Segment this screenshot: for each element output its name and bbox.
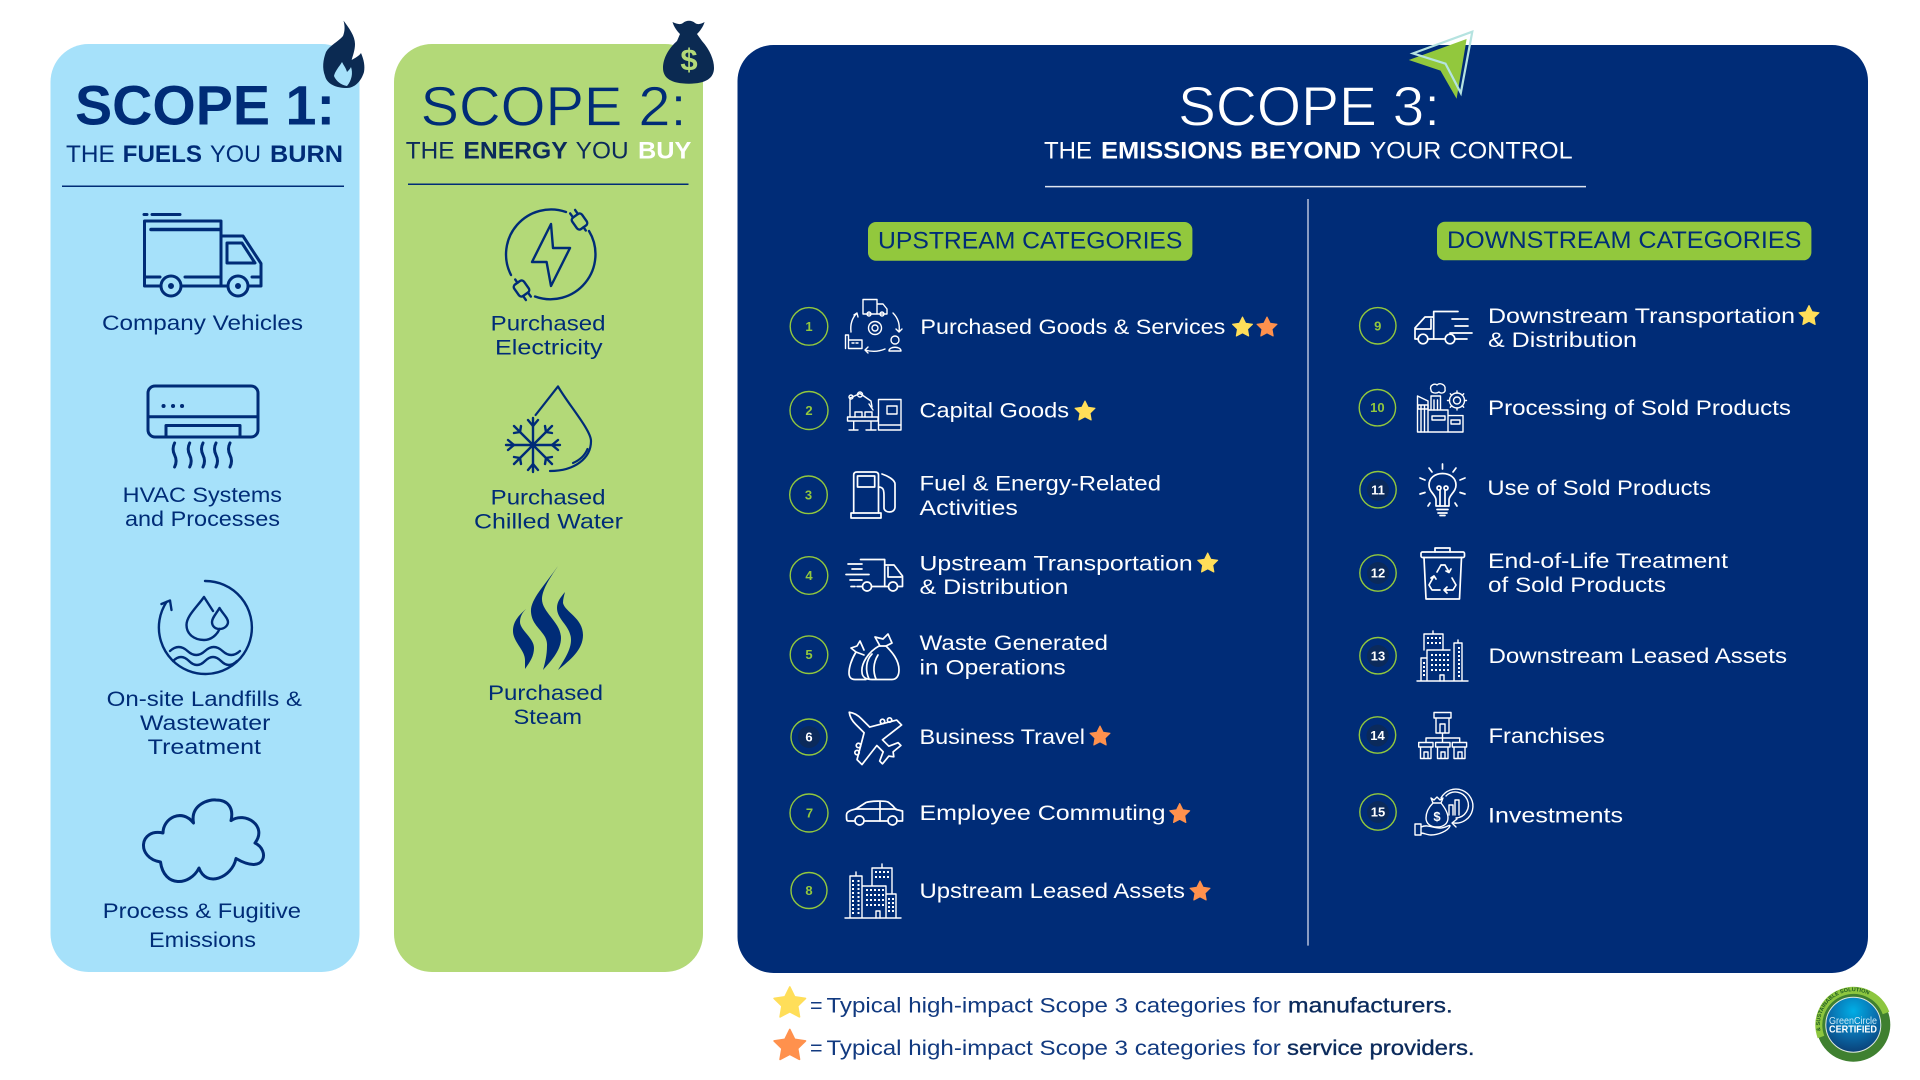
badge: greencircle certified: CERTIFIED <box>1829 1023 1877 1035</box>
category 7: 7 <box>806 806 813 820</box>
category 10 <box>1359 384 1791 432</box>
label: Processing of Sold Products <box>1488 397 1791 420</box>
icon: electricity plug circle <box>506 208 595 302</box>
star: service providers <box>1090 726 1110 745</box>
legend text: = <box>810 993 823 1017</box>
icon: factory robot <box>848 392 901 430</box>
icon: fuel pump <box>851 472 895 518</box>
category 2: 2 <box>805 403 813 418</box>
label: Employee Commuting <box>920 802 1166 825</box>
category 6 <box>791 692 1110 777</box>
category 2 <box>790 392 1095 430</box>
subheading: the fuels you burn <box>66 141 343 168</box>
upstream column heading: UPSTREAM CATEGORIES <box>878 228 1182 255</box>
label: on-site landfills and wastewater treatment <box>107 688 302 759</box>
legend: manufacturers <box>774 987 1453 1017</box>
label: in Operations <box>920 656 1066 679</box>
label: & Distribution <box>920 576 1068 599</box>
label: Activities <box>920 497 1018 520</box>
label: process and fugitive emissions: Process & Fugitive <box>103 900 301 923</box>
label <box>920 552 1193 599</box>
label: company vehicles: Company Vehicles <box>102 312 303 335</box>
label: purchased electricity <box>491 313 606 360</box>
panel: scope 1 <box>50 21 364 972</box>
icon: city buildings <box>1417 631 1468 681</box>
icon: waste bags <box>849 634 899 680</box>
panel background <box>394 44 703 972</box>
subheading: the emissions beyond your control: EMISSIONS <box>1101 137 1242 164</box>
icon: franchise stores <box>1419 712 1467 758</box>
category 12: 12 <box>1371 566 1385 580</box>
subheading: the fuels you burn: BURN <box>270 141 343 168</box>
icon: money bag <box>663 21 714 84</box>
category 5: 5 <box>805 647 813 662</box>
label: process and fugitive emissions <box>103 900 301 952</box>
subheading: the energy you buy: BUY <box>638 137 691 164</box>
label: on-site landfills and wastewater treatment: Wastewater <box>140 712 270 735</box>
subheading: the emissions beyond your control <box>1044 137 1573 164</box>
legend star: orange <box>774 1030 805 1059</box>
star: manufacturers <box>1198 553 1218 572</box>
label: Upstream Leased Assets <box>920 880 1185 903</box>
legend text <box>810 993 1453 1017</box>
category 7 <box>790 794 1190 832</box>
category 4 <box>790 552 1218 599</box>
heading: scope 1: SCOPE 1: <box>75 74 335 137</box>
legend text: service providers. <box>1287 1036 1475 1060</box>
label: purchased electricity: Purchased <box>491 313 606 336</box>
label: Franchises <box>1488 725 1605 748</box>
star: manufacturers <box>1075 401 1095 420</box>
icon: chilled water drop <box>506 386 591 472</box>
icon: processing factory <box>1418 384 1466 432</box>
label <box>920 473 1161 520</box>
star: service providers <box>1170 804 1190 822</box>
subheading: the fuels you burn: YOU <box>210 141 261 168</box>
subheading: the energy you buy: ENERGY <box>463 137 568 164</box>
label: Investments <box>1488 804 1623 827</box>
subheading: the emissions beyond your control: THE <box>1044 137 1092 164</box>
panel: scope 2 <box>394 21 714 972</box>
category 8 <box>791 864 1210 918</box>
panel: scope 3 <box>738 32 1868 973</box>
icon: flame <box>323 21 364 88</box>
icon: investment hand and bag: $ <box>1433 809 1441 824</box>
label <box>1488 550 1728 597</box>
category 1 <box>790 300 1277 353</box>
label: Business Travel <box>920 726 1085 749</box>
label: hvac systems and processes: HVAC Systems <box>123 484 282 507</box>
icon: city buildings <box>845 864 901 918</box>
legend text: = <box>810 1036 823 1060</box>
subheading: the emissions beyond your control: BEYOND <box>1250 137 1361 164</box>
legend text: manufacturers. <box>1288 993 1453 1017</box>
icon: hvac unit <box>148 386 258 467</box>
category 13: 13 <box>1371 648 1385 664</box>
icon: steam <box>513 566 583 670</box>
category 4: 4 <box>805 568 813 583</box>
category 14 <box>1359 712 1605 758</box>
category 12 <box>1360 548 1728 599</box>
label: Waste Generated <box>920 632 1108 655</box>
label: purchased chilled water: Chilled Water <box>474 511 623 534</box>
label: Downstream Leased Assets <box>1488 645 1787 668</box>
category 6: 6 <box>805 730 813 744</box>
category 5 <box>790 632 1108 680</box>
star: manufacturers <box>1799 306 1819 324</box>
icon: delivery truck <box>846 560 902 591</box>
heading: scope 3: SCOPE 3: <box>1178 75 1440 138</box>
panel background <box>738 45 1868 973</box>
icon: light bulb <box>1420 464 1465 516</box>
legend text: Typical high-impact Scope 3 categories for <box>826 993 1281 1017</box>
heading: scope 2: SCOPE 2: <box>420 74 686 137</box>
icon: value chain <box>846 300 902 353</box>
downstream column heading: DOWNSTREAM CATEGORIES <box>1447 227 1801 254</box>
category 3: 3 <box>805 487 812 502</box>
label: & Distribution <box>1488 329 1637 352</box>
legend text <box>810 1036 1475 1060</box>
label: of Sold Products <box>1488 574 1666 597</box>
label: purchased chilled water: Purchased <box>491 486 606 510</box>
icon: money bag: $ <box>680 42 698 77</box>
icon: water cycle <box>159 581 252 674</box>
category 9: 9 <box>1374 318 1381 333</box>
label: hvac systems and processes: and Processes <box>125 508 280 531</box>
upstream column heading <box>868 222 1192 261</box>
icon: delivery truck <box>1415 312 1472 344</box>
icon: airplane <box>829 692 914 777</box>
icon: paper arrow <box>1409 32 1472 99</box>
label <box>1488 305 1795 352</box>
legend: service providers <box>774 1030 1475 1060</box>
label: purchased steam: Steam <box>514 706 582 729</box>
category 13 <box>1360 631 1787 681</box>
category 9 <box>1360 305 1819 352</box>
label: Downstream Transportation <box>1488 305 1795 328</box>
star: manufacturers <box>1233 317 1252 336</box>
subheading: the energy you buy: THE <box>406 137 454 164</box>
label: Upstream Transportation <box>920 552 1193 575</box>
category 10: 10 <box>1370 400 1385 415</box>
label: purchased chilled water <box>474 486 623 534</box>
category 11: 11 <box>1371 482 1385 498</box>
badge: greencircle certified <box>1815 986 1890 1062</box>
label: Purchased Goods & Services <box>920 316 1225 339</box>
subheading: the fuels you burn: FUELS <box>123 141 202 168</box>
label: End-of-Life Treatment <box>1488 550 1728 573</box>
label: purchased steam <box>488 682 603 729</box>
category 14: 14 <box>1370 728 1385 743</box>
label: Capital Goods <box>920 400 1069 423</box>
label: purchased steam: Purchased <box>488 682 603 705</box>
label: process and fugitive emissions: Emissions <box>149 929 256 952</box>
label: on-site landfills and wastewater treatment: On-site Landfills & <box>107 688 302 711</box>
label: hvac systems and processes <box>123 484 282 531</box>
star: service providers <box>1257 317 1277 336</box>
label: purchased electricity: Electricity <box>495 337 603 360</box>
subheading: the energy you buy <box>406 137 691 164</box>
category 11 <box>1360 464 1711 516</box>
category 15 <box>1360 789 1623 835</box>
star: service providers <box>1190 881 1210 900</box>
category 3 <box>790 472 1161 520</box>
icon: investment hand and bag <box>1415 789 1473 835</box>
icon: recycling bin <box>1421 548 1464 599</box>
category 8: 8 <box>805 883 813 898</box>
subheading: the emissions beyond your control: YOUR <box>1370 137 1441 164</box>
badge: greencircle certified: GreenCircle <box>1829 1015 1877 1027</box>
subheading: the fuels you burn: THE <box>66 141 115 168</box>
panel background <box>50 44 360 972</box>
legend text: Typical high-impact Scope 3 categories for <box>826 1036 1281 1060</box>
label <box>920 632 1108 679</box>
icon: cloud <box>144 800 263 882</box>
subheading: the energy you buy: YOU <box>576 137 629 164</box>
downstream column heading <box>1437 222 1811 260</box>
icon: truck <box>144 214 261 296</box>
legend star: yellow <box>774 987 805 1017</box>
label: Use of Sold Products <box>1487 477 1711 500</box>
icon: car <box>846 801 902 825</box>
label: on-site landfills and wastewater treatment: Treatment <box>148 736 261 759</box>
category 15: 15 <box>1371 804 1385 820</box>
subheading: the emissions beyond your control: CONTROL <box>1449 137 1573 164</box>
badge: greencircle certified: & SUSTAINABLE SOLUTION <box>1816 987 1870 1031</box>
label: Fuel & Energy-Related <box>920 473 1161 496</box>
category 1: 1 <box>805 319 813 334</box>
